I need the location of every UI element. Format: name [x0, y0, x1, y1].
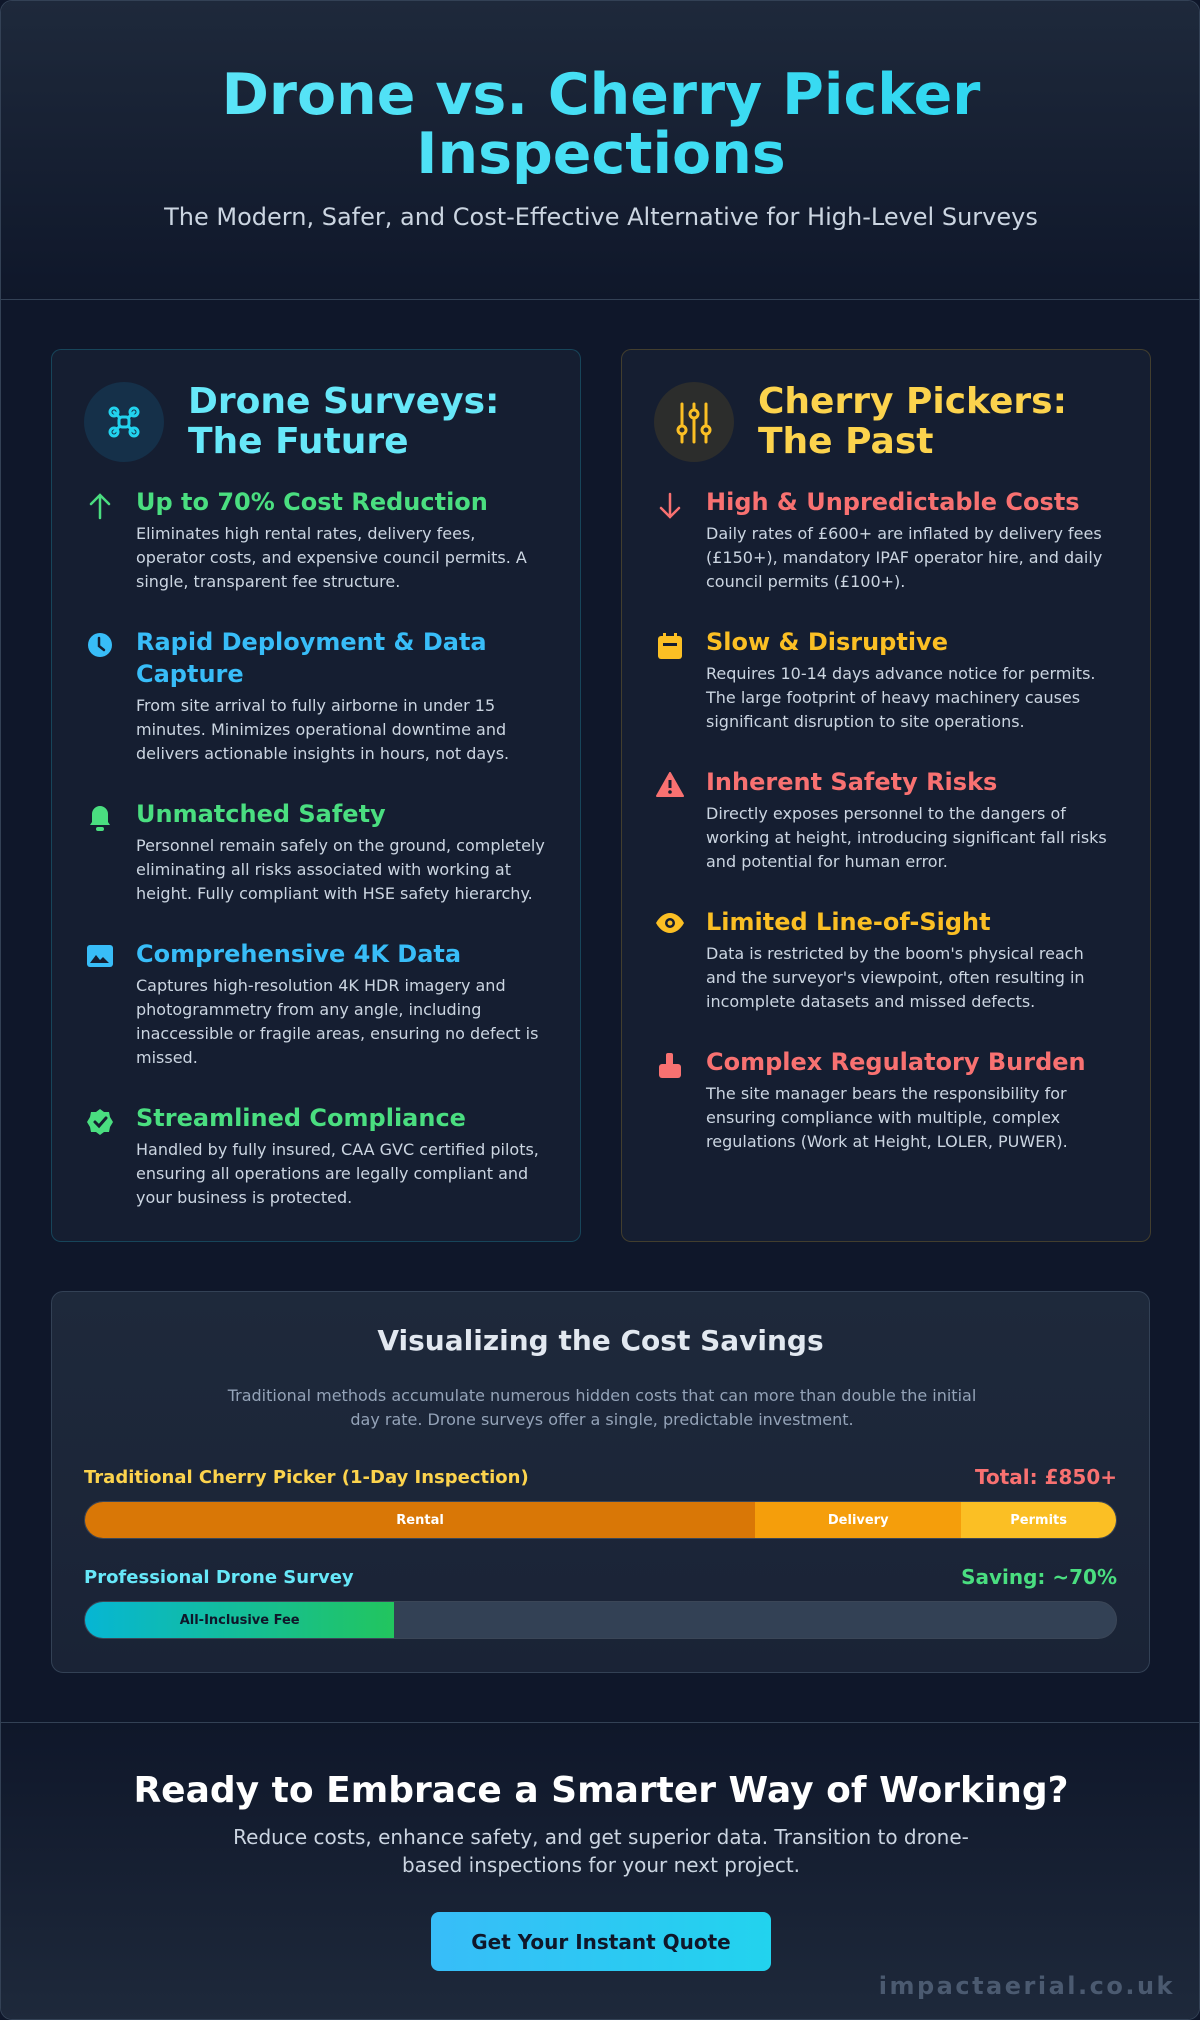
item: slow	[658, 628, 1096, 731]
label: cherry picker: Traditional Cherry Picker (1-Day Inspection)	[84, 1466, 529, 1488]
item: cost reduction: Up to 70% Cost Reduction	[136, 488, 488, 516]
panel: cherry pickers	[621, 349, 1151, 1242]
item: cost reduction: Eliminates high rental rates, delivery fees, operator costs, and expensive council permits. A single, transparent fee structure.	[136, 524, 527, 591]
item: 4K data: Captures high-resolution 4K HDR imagery and photogrammetry from any angle, including inaccessible or fragile areas, ensuring no defect is missed.	[136, 976, 538, 1067]
bar chart: cherry picker costs: Rental	[396, 1512, 444, 1528]
item: regulatory: The site manager bears the responsibility for ensuring compliance with multiple, complex regulations (Work at Height, LOLER, PUWER).	[706, 1084, 1068, 1151]
title: Inspections	[416, 121, 786, 187]
item: regulatory	[659, 1048, 1086, 1151]
label: cherry picker	[84, 1465, 1117, 1489]
header	[1, 1, 1200, 300]
item: regulatory: Complex Regulatory Burden	[706, 1048, 1086, 1076]
panel heading: cherry pickers: The Past	[758, 421, 933, 462]
icon: drone	[84, 382, 164, 462]
item: safety: Personnel remain safely on the ground, completely eliminating all risks associated with working at height. Fully compliant with HSE safety hierarchy.	[136, 836, 545, 903]
item: rapid deployment: Rapid Deployment & Data	[136, 628, 487, 656]
item: slow: Slow & Disruptive	[706, 628, 948, 656]
item: compliance: Handled by fully insured, CAA GVC certified pilots, ensuring all operations are legally compliant and your business is protected.	[136, 1140, 539, 1207]
panel: cost savings	[51, 1291, 1150, 1673]
label: drone survey: Professional Drone Survey	[84, 1566, 354, 1588]
bar chart: cherry picker costs	[84, 1501, 1117, 1539]
item: 4K data: Comprehensive 4K Data	[136, 940, 461, 968]
bar chart: drone cost: All-Inclusive Fee	[180, 1612, 300, 1628]
bar chart: cherry picker costs: Permits	[1010, 1512, 1067, 1528]
item: cost reduction	[90, 488, 527, 591]
item: rapid deployment: From site arrival to fully airborne in under 15 minutes. Minimizes operational downtime and delivers actionable insights in hours, not days.	[136, 696, 509, 763]
item: compliance	[87, 1104, 539, 1207]
label: drone survey: Saving: ~70%	[961, 1565, 1117, 1589]
panel heading: cherry pickers: Cherry Pickers:	[758, 381, 1067, 422]
item: line of sight	[656, 908, 1085, 1011]
panel heading: drone: The Future	[188, 421, 409, 462]
item: slow: Requires 10-14 days advance notice for permits. The large footprint of heavy machinery causes significant disruption to site operations.	[706, 664, 1096, 731]
item: high costs: High & Unpredictable Costs	[706, 488, 1080, 516]
item: high costs	[660, 488, 1102, 591]
subtitle: The Modern, Safer, and Cost-Effective Alternative for High-Level Surveys	[164, 203, 1038, 231]
item: safety risks: Directly exposes personnel to the dangers of working at height, introducing significant fall risks and potential for human error.	[706, 804, 1107, 871]
item: safety risks	[656, 768, 1107, 871]
panel: drone surveys	[51, 349, 581, 1242]
label: drone survey	[84, 1565, 1117, 1589]
label: cherry picker: Total: £850+	[975, 1465, 1117, 1489]
panel heading: cherry pickers	[654, 381, 1067, 462]
item: high costs: Daily rates of £600+ are inflated by delivery fees (£150+), mandatory IPAF operator hire, and daily council permits (£100+).	[706, 524, 1102, 591]
cost description: Traditional methods accumulate numerous hidden costs that can more than double the initial day rate. Drone surveys offer a single, predictable investment.	[228, 1386, 976, 1429]
icon: sliders	[654, 382, 734, 462]
cost heading: Visualizing the Cost Savings	[377, 1324, 824, 1357]
footer call to action	[1, 1722, 1200, 2020]
cta text: Reduce costs, enhance safety, and get superior data. Transition to drone-based inspections for your next project.	[233, 1825, 969, 1877]
item: 4K data	[87, 940, 538, 1067]
cta heading: Ready to Embrace a Smarter Way of Working?	[133, 1770, 1069, 1811]
item: compliance: Streamlined Compliance	[136, 1104, 466, 1132]
item: line of sight: Limited Line-of-Sight	[706, 908, 991, 936]
bar chart: cherry picker costs: Delivery	[828, 1512, 889, 1528]
item: safety risks: Inherent Safety Risks	[706, 768, 997, 796]
bar chart: drone cost	[84, 1601, 1117, 1639]
item: rapid deployment: Capture	[136, 660, 244, 688]
title	[1, 66, 1200, 184]
panel heading: drone: Drone Surveys:	[188, 381, 499, 422]
item: safety: Unmatched Safety	[136, 800, 386, 828]
item: safety	[90, 800, 545, 903]
button: Get Your Instant Quote	[471, 1930, 731, 1954]
button	[431, 1912, 771, 1971]
item: line of sight: Data is restricted by the boom's physical reach and the surveyor's viewpoint, often resulting in incomplete datasets and missed defects.	[706, 944, 1085, 1011]
watermark: impactaerial.co.uk	[879, 1972, 1175, 2000]
item: rapid deployment	[88, 628, 509, 763]
panel heading: drone	[84, 381, 499, 462]
title: Drone vs. Cherry Picker	[222, 62, 980, 128]
